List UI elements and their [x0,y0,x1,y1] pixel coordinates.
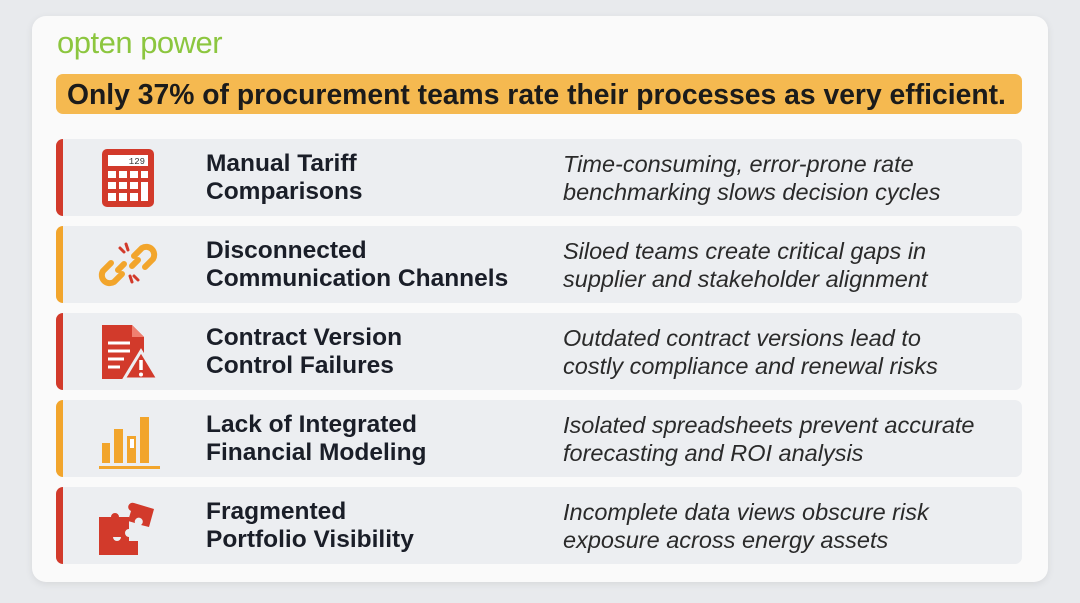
title banner: Only 37% of procurement teams rate their processes as very efficient. [67,78,1006,110]
row 3 title [206,324,402,379]
row 1 description: Time-consuming, error-prone rate [563,151,914,177]
row 4 title [206,411,427,466]
row 4 description: Isolated spreadsheets prevent accurate [563,412,975,438]
icon: puzzle [99,502,154,555]
row 2 description [563,238,928,292]
icon: document warning [102,325,156,379]
row 4 title: Financial Modeling [206,439,427,466]
row 5 description [563,499,930,553]
row 4 description [563,412,975,466]
row 2 title [206,237,508,292]
row 1 description [563,151,940,205]
icon: bar chart [99,417,160,469]
row 4 title: Lack of Integrated [206,411,417,438]
row 1 description: benchmarking slows decision cycles [563,179,940,205]
row 3 title: Contract Version [206,324,402,351]
icon: calculator: 129 [129,157,145,167]
row 5 title: Portfolio Visibility [206,526,414,553]
row 5 description: exposure across energy assets [563,527,888,553]
row 3 title: Control Failures [206,352,394,379]
row 2 description: Siloed teams create critical gaps in [563,238,926,264]
row 2 title: Communication Channels [206,265,508,292]
row 2 title: Disconnected [206,237,367,264]
row 5 title [206,498,414,553]
row 3 [56,313,1022,390]
row 4 [56,400,1022,477]
row 1 title: Manual Tariff [206,150,357,177]
logo: opten power [57,25,222,60]
row 1 title [206,150,363,205]
icon: broken link [98,242,158,286]
row 3 description: Outdated contract versions lead to [563,325,921,351]
row 5 description: Incomplete data views obscure risk [563,499,929,525]
row 3 description: costly compliance and renewal risks [563,353,938,379]
row 2 description: supplier and stakeholder alignment [563,266,927,292]
row 5 [56,487,1022,564]
row 2 [56,226,1022,303]
row 1 title: Comparisons [206,178,363,205]
row 3 description [563,325,938,379]
icon: calculator [102,149,154,207]
row 4 description: forecasting and ROI analysis [563,440,863,466]
row 5 title: Fragmented [206,498,346,525]
row 1 [56,139,1022,216]
